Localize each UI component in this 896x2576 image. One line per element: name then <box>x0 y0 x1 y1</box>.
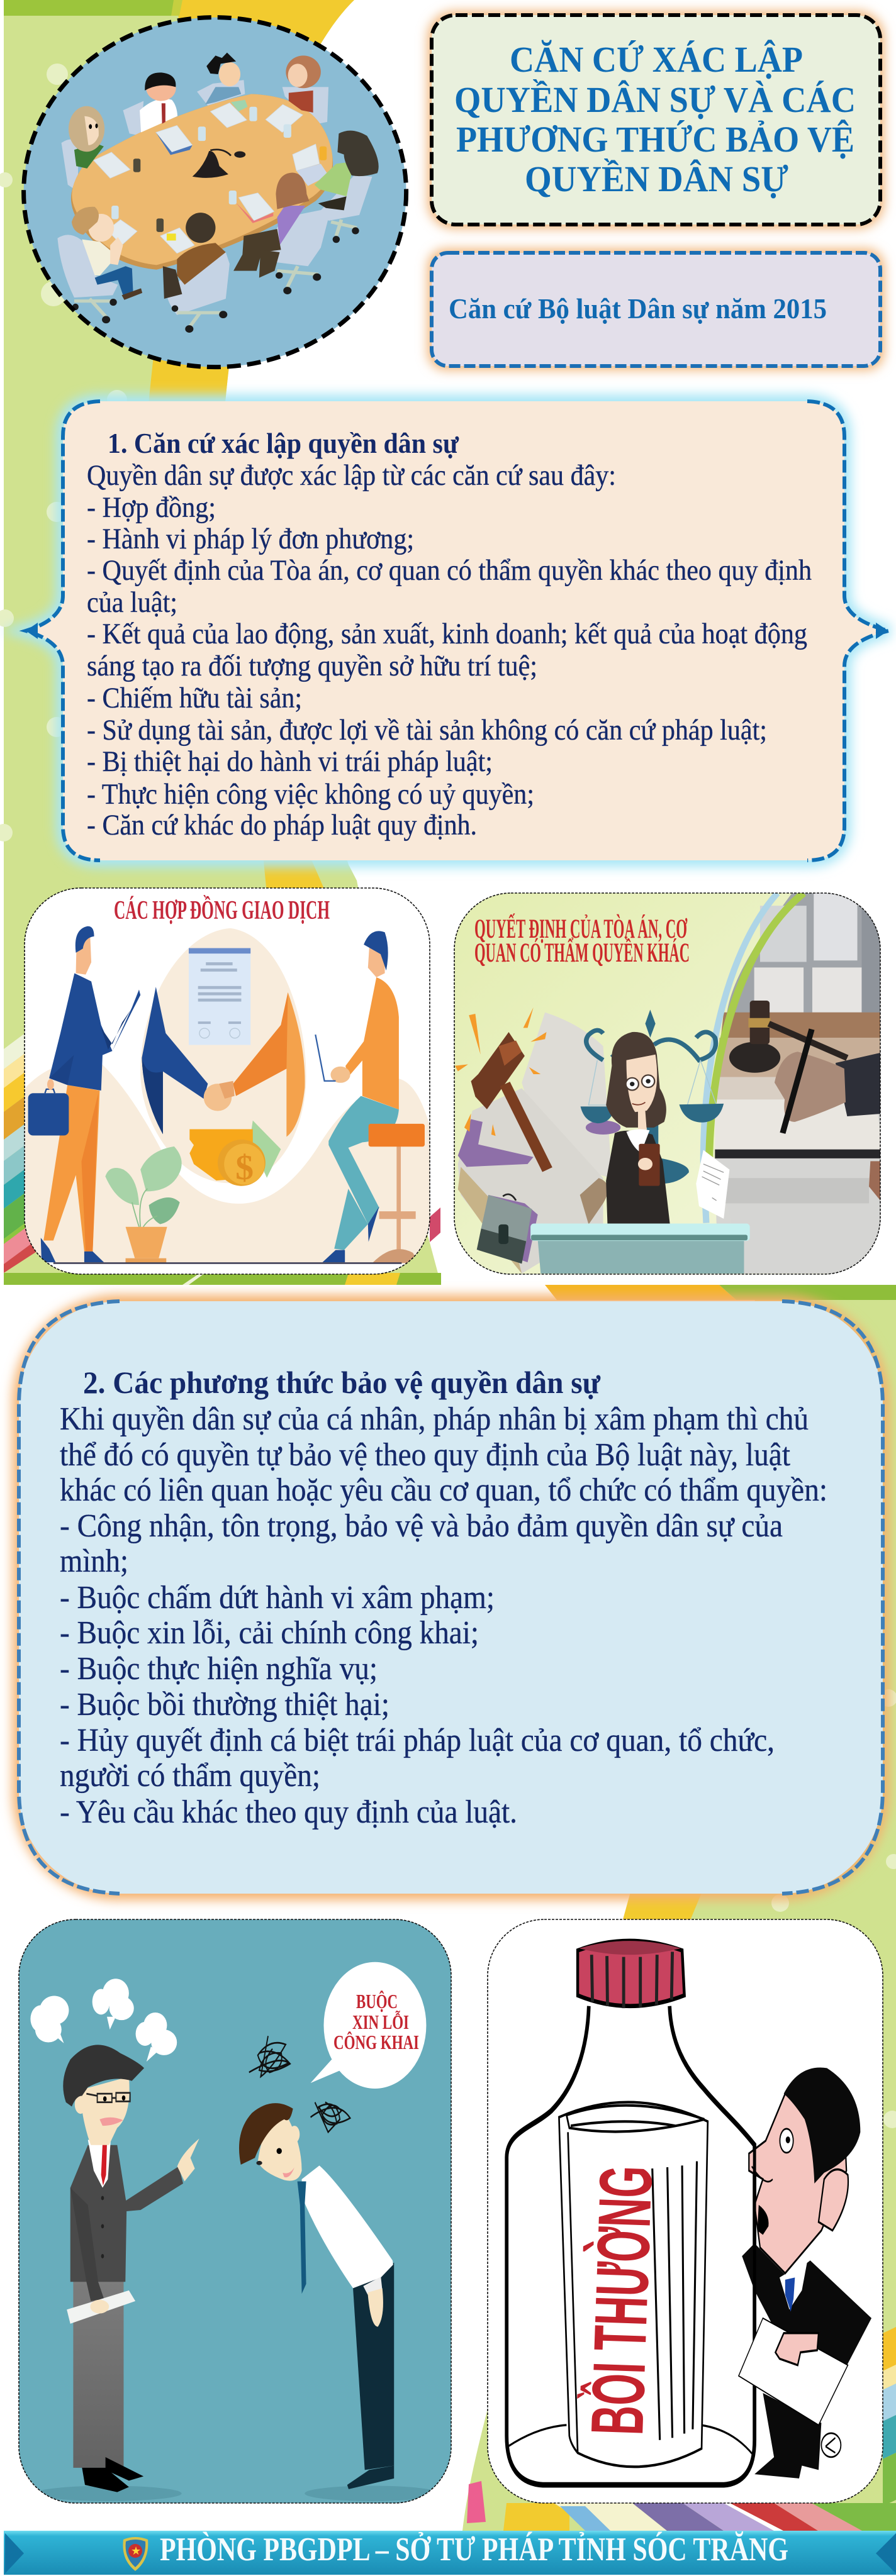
panel 1 list text: - Kết quả của lao động, sản xuất, kinh doanh; kết quả của hoạt động <box>87 618 807 650</box>
image: court decisions <box>454 893 885 1274</box>
title text: PHƯƠNG THỨC BẢO VỆ <box>456 119 854 160</box>
floor shadows <box>35 2485 182 2501</box>
briefcase <box>478 1195 538 1262</box>
speech text: BUỘC <box>356 1990 398 2012</box>
panel 1 list text: - Bị thiệt hại do hành vi trái pháp luật; <box>87 745 493 778</box>
image 2 caption: QUYẾT ĐỊNH CỦA TÒA ÁN, CƠ <box>474 914 688 944</box>
orange rays <box>455 1008 547 1136</box>
handshake arms <box>142 987 208 1134</box>
open book <box>522 1013 612 1178</box>
person: brown jacket <box>177 243 226 285</box>
speech text <box>333 1990 419 2053</box>
plant <box>105 1168 139 1205</box>
microphone <box>193 151 228 178</box>
person: white shirt <box>140 99 177 132</box>
panel 2 list text: thể đó có quyền tự bảo vệ theo quy định của Bộ luật này, luật <box>60 1437 791 1473</box>
panel 2 list text <box>60 1401 827 1830</box>
purple T <box>458 1119 534 1167</box>
image: contracts and transactions <box>25 888 430 1274</box>
panel 1 list text: sáng tạo ra đối tượng quyền sở hữu trí tuệ; <box>87 650 537 682</box>
glasses <box>86 2093 130 2102</box>
panel 1 list text <box>87 459 812 841</box>
court document <box>696 1150 729 1219</box>
panel 1 list text: - Hành vi pháp lý đơn phương; <box>87 523 414 555</box>
caricature man body <box>742 2243 871 2372</box>
tie <box>298 2181 306 2294</box>
image 2 caption: QUAN CÓ THẨM QUYỀN KHÁC <box>474 937 690 968</box>
panel 2 list text: - Buộc bồi thường thiệt hại; <box>60 1687 389 1723</box>
peach wave <box>25 1062 430 1262</box>
contract document <box>189 948 250 1045</box>
jacket <box>70 2145 183 2282</box>
artist mark <box>821 2433 841 2457</box>
panel 1 list text: - Quyết định của Tòa án, cơ quan có thẩm quyền khác theo quy định <box>87 554 812 587</box>
footer banner <box>4 2531 896 2575</box>
stool <box>396 1146 401 1258</box>
image: contracts and transactions: $ <box>235 1148 254 1187</box>
person: blond man <box>82 240 115 275</box>
person: purple top <box>277 206 305 245</box>
subtitle box <box>428 249 884 370</box>
panel 2 list text: - Công nhận, tôn trọng, bảo vệ và bảo đảm quyền dân sự của <box>60 1508 783 1544</box>
panel 1 list text: - Thực hiện công việc không có uỷ quyền; <box>87 778 534 811</box>
subtitle text: Căn cứ Bộ luật Dân sự năm 2015 <box>449 292 827 325</box>
scales of justice <box>645 1009 656 1038</box>
coins and cash <box>250 1121 281 1178</box>
panel 2 list text: - Hủy quyết định cá biệt trái pháp luật của cơ quan, tổ chức, <box>60 1723 775 1758</box>
photo hand and pen <box>836 1052 885 1116</box>
bottle outline <box>507 2006 754 2485</box>
panel 2 list text: - Buộc xin lỗi, cải chính công khai; <box>60 1615 479 1651</box>
speech text: XIN LỖI <box>352 2011 409 2033</box>
icon: justice emblem <box>123 2537 148 2571</box>
person: spiky hair <box>205 87 241 104</box>
panel 1 heading: 1. Căn cứ xác lập quyền dân sự <box>108 428 459 459</box>
photo background <box>715 893 885 1274</box>
bottle cap <box>578 1941 685 2006</box>
panel 2 list text: - Buộc chấm dứt hành vi xâm phạm; <box>60 1580 495 1616</box>
illustration: meeting around a table <box>24 18 406 367</box>
title text <box>454 39 856 199</box>
head <box>81 2077 130 2145</box>
document and hand <box>739 2318 848 2425</box>
newspaper <box>67 2290 135 2324</box>
bowing man trousers <box>353 2263 394 2470</box>
hand <box>367 2288 383 2327</box>
icon: justice emblem: ★ <box>131 2545 141 2558</box>
panel 2 list text: Khi quyền dân sự của cá nhân, pháp nhân bị xâm phạm thì chủ <box>60 1401 809 1437</box>
image 2 caption <box>474 914 690 968</box>
panel 2 list text: khác có liên quan hoặc yêu cầu cơ quan, tổ chức có thẩm quyền: <box>60 1472 827 1508</box>
panel 1 list text: - Hợp đồng; <box>87 491 216 524</box>
bench <box>538 1240 744 1274</box>
image: compensation bottle <box>488 1919 883 2503</box>
bottle label: BỒI THƯỜNG <box>575 2165 668 2436</box>
head <box>258 2119 302 2181</box>
judge <box>606 1131 670 1224</box>
panel 2 list text: người có thẩm quyền; <box>60 1758 320 1794</box>
shirt <box>302 2165 393 2288</box>
person: long dark hair <box>315 162 354 196</box>
person: red-brown hair <box>289 91 313 113</box>
panel 2 list text: - Buộc thực hiện nghĩa vụ; <box>60 1651 378 1687</box>
panel 1 list text: - Căn cứ khác do pháp luật quy định. <box>87 809 477 841</box>
curved stripes <box>703 893 778 1223</box>
panel: 2. protection methods <box>19 1301 883 1894</box>
wooden gavel <box>471 1032 525 1109</box>
title text: QUYỀN DÂN SỰ VÀ CÁC <box>454 79 856 120</box>
speech text: CÔNG KHAI <box>333 2031 419 2053</box>
papers and glasses <box>94 103 320 253</box>
panel 2 list text: mình; <box>60 1543 128 1579</box>
panel 1 list text: Quyền dân sự được xác lập từ các căn cứ sau đây: <box>87 459 616 492</box>
man left <box>43 1085 99 1252</box>
thought clouds <box>30 1979 177 2062</box>
panel 1 list text: của luật; <box>87 586 177 619</box>
standing man trousers <box>73 2280 123 2468</box>
title text: CĂN CỨ XÁC LẬP <box>510 39 803 80</box>
rolled newspaper <box>559 2102 708 2467</box>
panel 1 list text: - Chiếm hữu tài sản; <box>87 682 302 714</box>
chairs and wheels <box>57 80 372 333</box>
pot <box>126 1227 167 1258</box>
image 1 caption: CÁC HỢP ĐỒNG GIAO DỊCH <box>114 895 330 925</box>
title box <box>428 11 884 228</box>
person: blonde <box>74 143 104 169</box>
table <box>71 94 333 270</box>
image: public apology <box>19 1919 451 2503</box>
title text: QUYỀN DÂN SỰ <box>525 158 788 199</box>
man right <box>368 946 385 977</box>
panel 2 list text: - Yêu cầu khác theo quy định của luật. <box>60 1794 517 1830</box>
panel 1 list text: - Sử dụng tài sản, được lợi về tài sản không có căn cứ pháp luật; <box>87 714 767 747</box>
speech bubble <box>323 1962 426 2089</box>
scribbles <box>249 2036 350 2132</box>
photo gavel <box>729 1042 780 1073</box>
panel 2 heading: 2. Các phương thức bảo vệ quyền dân sự <box>83 1365 601 1400</box>
background: lower colourful shapes <box>462 1285 896 2531</box>
panel: 1. legal grounds <box>26 401 888 860</box>
pointing hand <box>177 2138 199 2181</box>
bottle right edge in front <box>751 2145 758 2440</box>
head <box>749 2094 846 2273</box>
